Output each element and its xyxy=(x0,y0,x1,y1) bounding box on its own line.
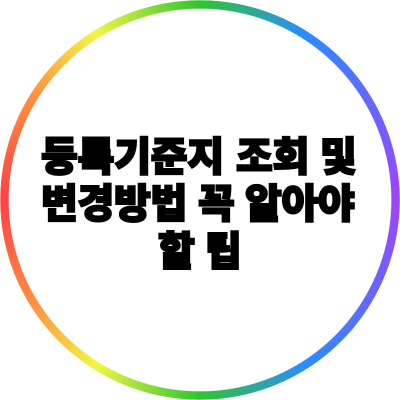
title: 할 팁 xyxy=(158,230,242,274)
title: 등록기준지 조회 및 xyxy=(41,136,357,180)
title: 변경방법 꼭 알아야 xyxy=(41,182,355,226)
